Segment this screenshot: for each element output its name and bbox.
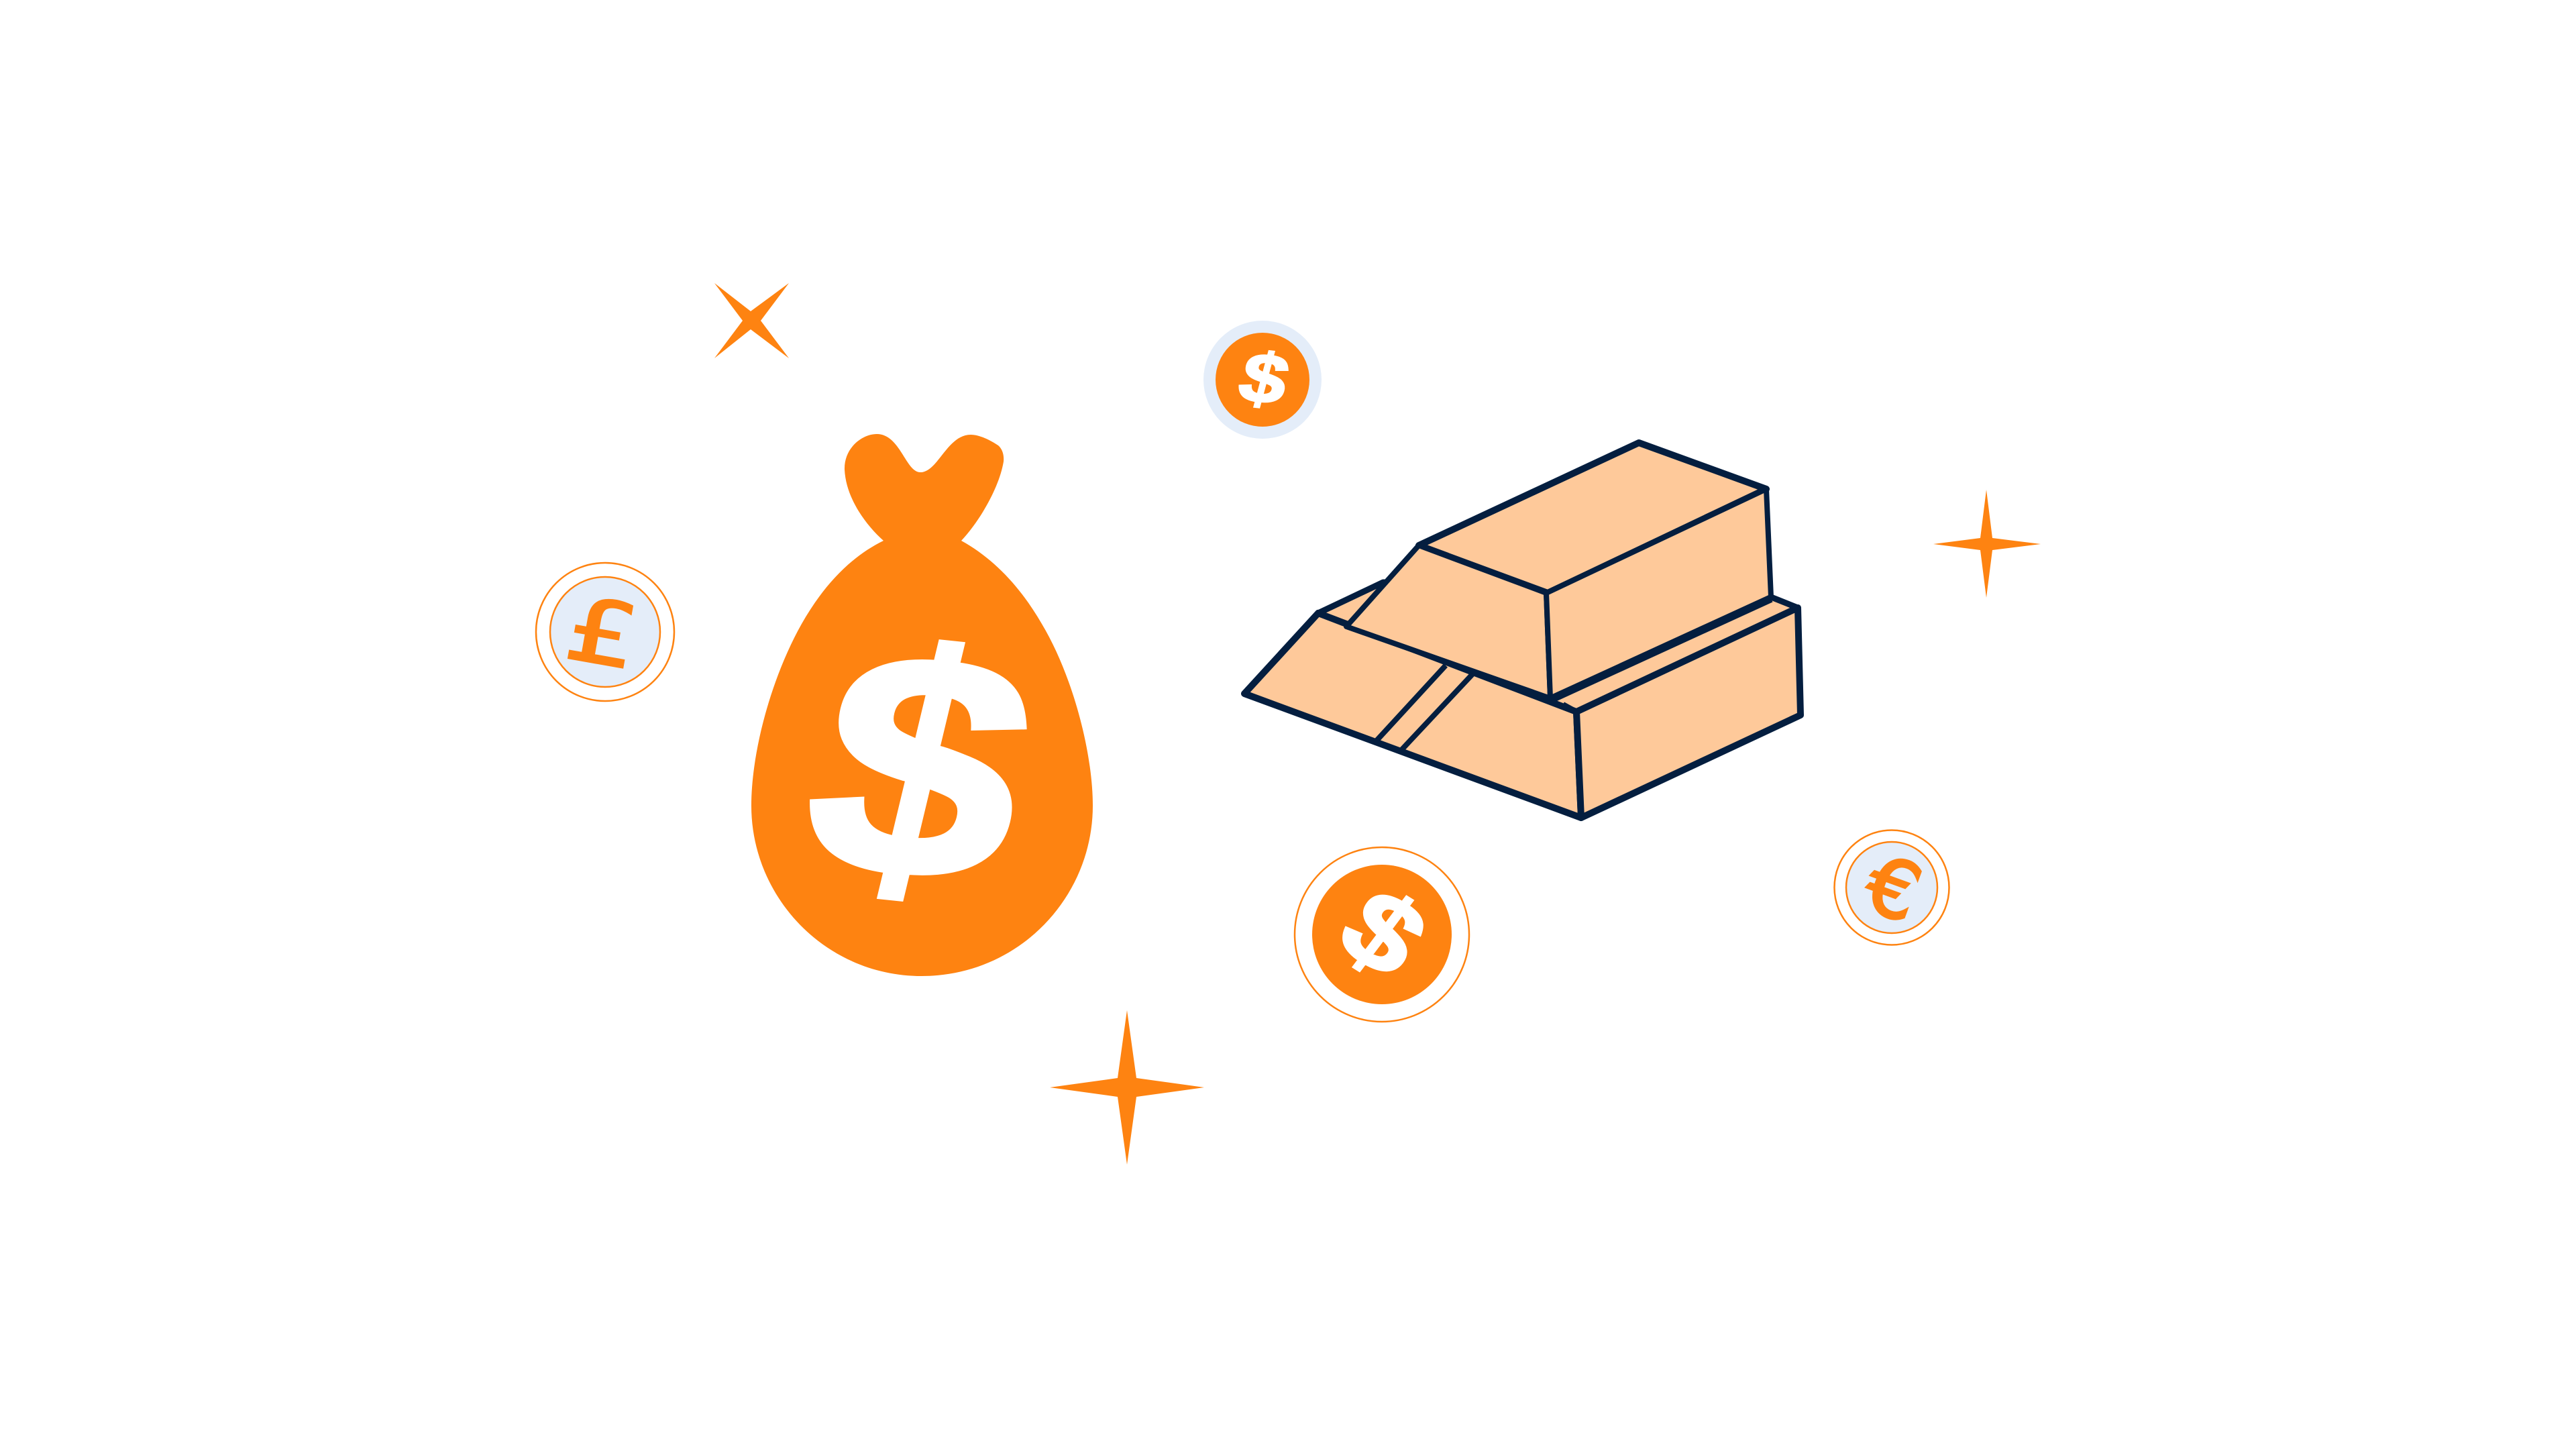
icon: sparkle bottom: [1050, 1010, 1204, 1165]
upper gold bar side face: [1546, 489, 1771, 698]
icon: pound coin: £: [558, 578, 646, 690]
dollar sign on bag: $: [777, 582, 1064, 951]
icon: gold bars: [1244, 443, 1801, 818]
upper gold bar top face: [1419, 443, 1766, 593]
icon: euro coin: €: [1854, 837, 1933, 941]
lower gold bar side face: [1576, 608, 1801, 818]
icon: sparkle right: [1933, 490, 2041, 598]
lower gold bar back: [1318, 582, 1798, 712]
strap lines on lower bar: [1377, 597, 1798, 749]
bag body and knot: [751, 434, 1093, 976]
icon: large dollar coin: $: [1318, 867, 1449, 999]
upper gold bar front face: [1346, 545, 1550, 698]
icon: euro coin: [1834, 830, 1949, 945]
lower gold bar front face: [1244, 613, 1581, 818]
icon: top dollar coin: $: [1231, 338, 1297, 420]
icon: sparkle top left: [714, 283, 789, 358]
icon: top dollar coin: [1203, 321, 1322, 439]
icon: pound coin: [536, 563, 674, 701]
icon: money bag: [751, 434, 1093, 976]
icon: large dollar coin: [1295, 847, 1469, 1022]
